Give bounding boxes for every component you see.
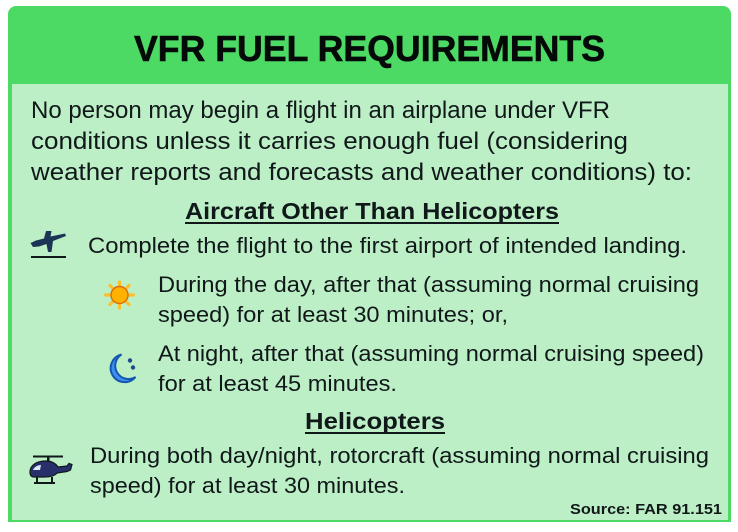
- title: VFR FUEL REQUIREMENTS: [134, 28, 605, 69]
- text: daytime requirement: During the day, after that (assuming normal cruising: [158, 272, 699, 297]
- intro text block: [30, 97, 692, 186]
- icon: airplane taking off: [30, 231, 66, 258]
- intro text block: No person may begin a flight in an airplane under VFR: [31, 97, 610, 124]
- heading: helicopters: Helicopters: [305, 408, 445, 434]
- text: helicopter requirement: During both day/night, rotorcraft (assuming normal cruising: [90, 443, 709, 468]
- intro text block: weather reports and forecasts and weather conditions) to:: [30, 159, 692, 186]
- icon: crescent moon and stars: [111, 354, 136, 382]
- heading: aircraft other than helicopters: Aircraft Other Than Helicopters: [185, 198, 559, 224]
- text: night requirement: [158, 341, 704, 396]
- text: daytime requirement: speed) for at least 30 minutes; or,: [158, 302, 508, 327]
- text: complete the flight: Complete the flight to the first airport of intended landing.: [88, 233, 687, 258]
- icon: helicopter: [30, 456, 72, 483]
- icon: sun: [106, 282, 134, 308]
- source note: Source: FAR 91.151: [570, 502, 722, 518]
- text: night requirement: for at least 45 minutes.: [158, 371, 397, 396]
- text: helicopter requirement: speed) for at least 30 minutes.: [90, 473, 405, 498]
- intro text block: conditions unless it carries enough fuel (considering: [31, 128, 628, 155]
- text: daytime requirement: [158, 272, 699, 327]
- text: night requirement: At night, after that (assuming normal cruising speed): [158, 341, 704, 366]
- text: helicopter requirement: [90, 443, 709, 498]
